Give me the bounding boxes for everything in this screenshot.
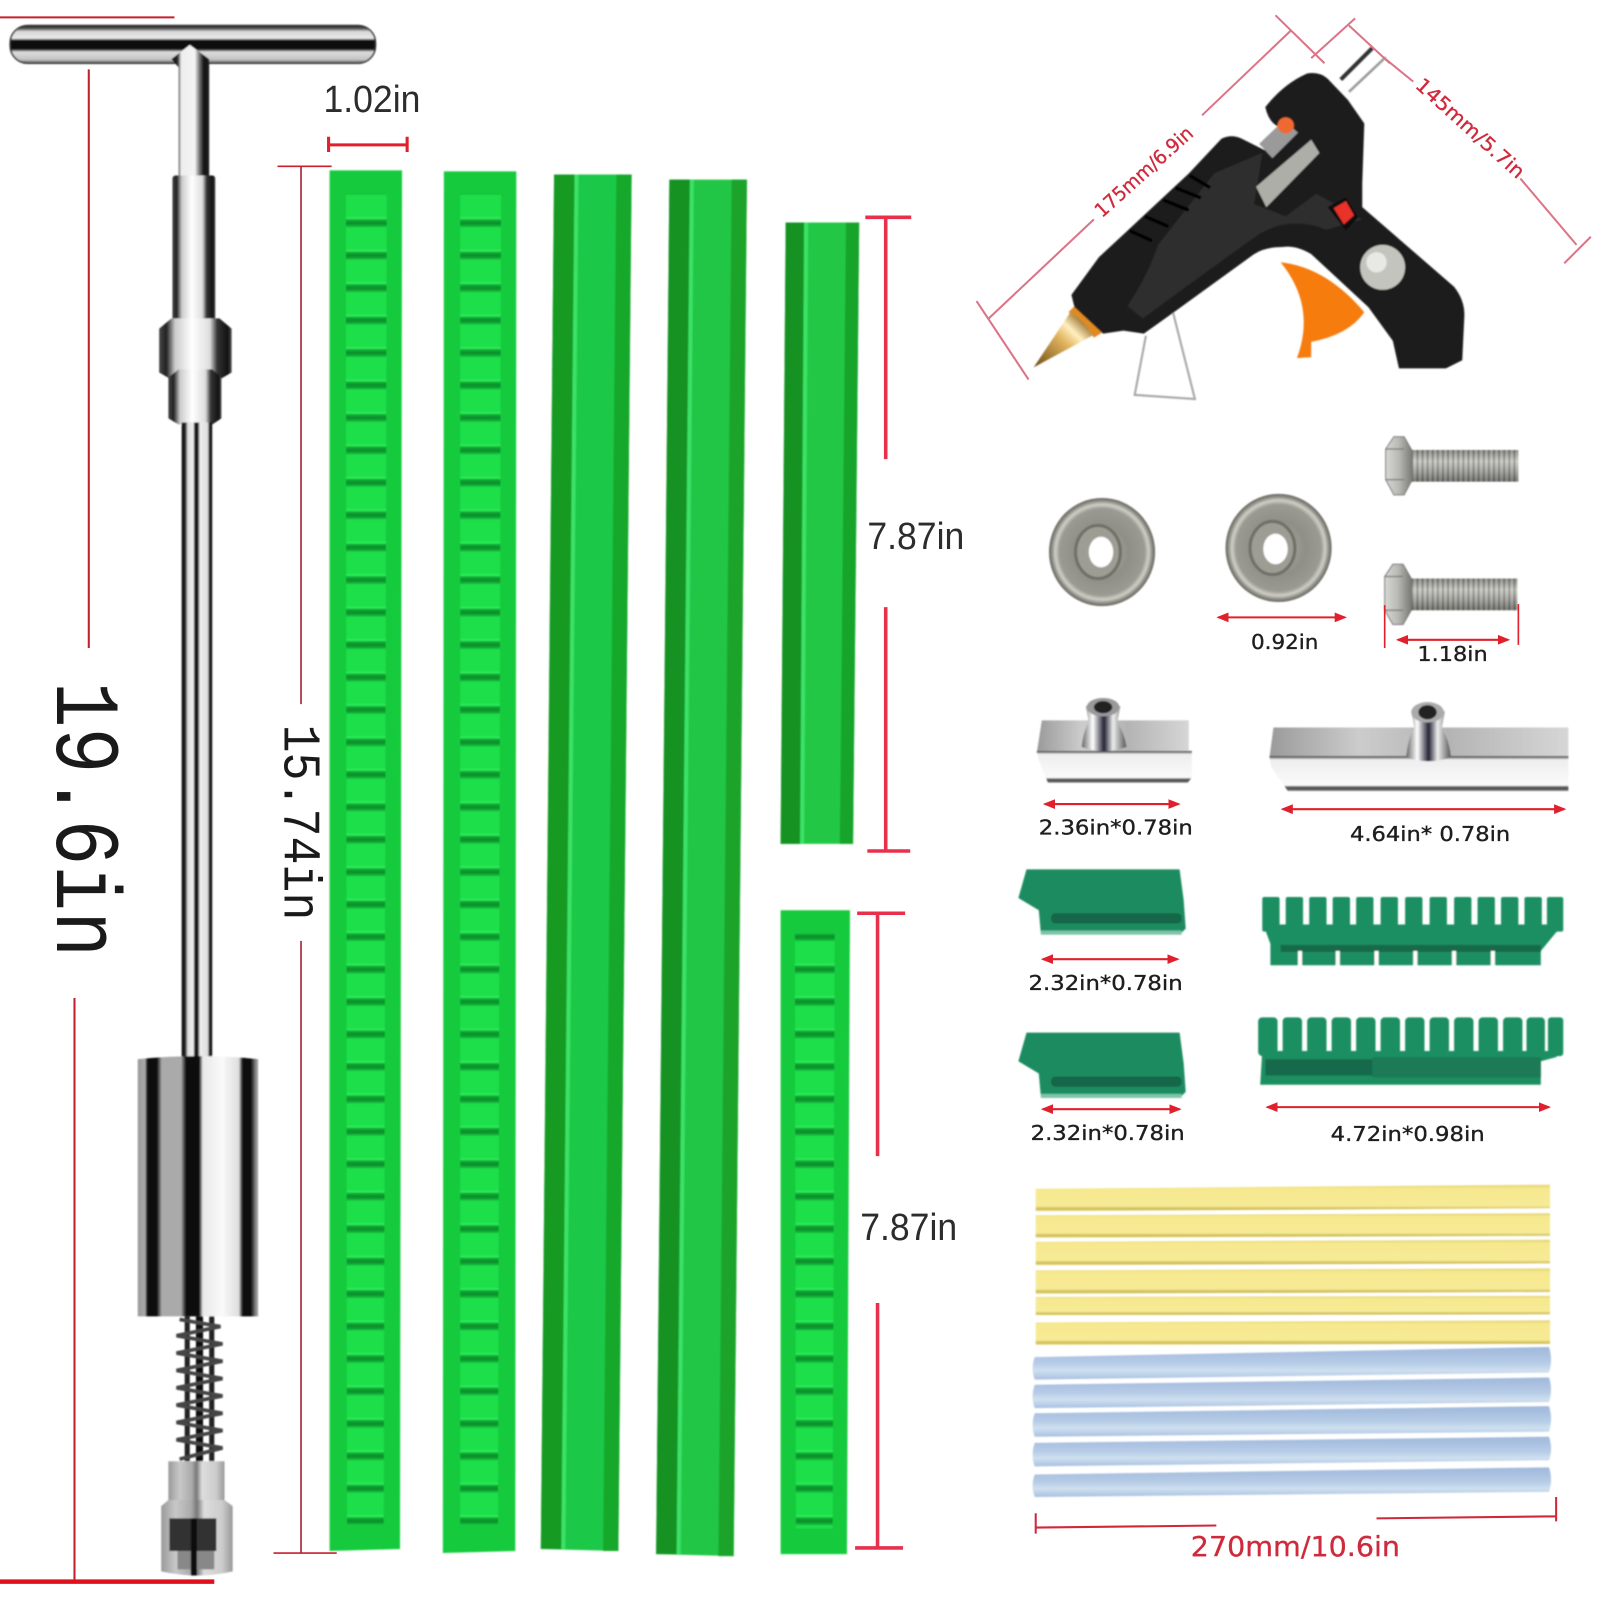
puller tip: [161, 1461, 233, 1576]
toothed strip 1: [330, 170, 402, 1551]
green tab lower: [1018, 1033, 1186, 1098]
feed rods: [1341, 48, 1372, 80]
dent puller tool: [10, 26, 376, 1576]
dimension: 145mm/5.7in: [1311, 18, 1591, 263]
stand wire: [1135, 302, 1195, 399]
dimension: 1.02in: 1.02in: [323, 78, 420, 120]
label: 2.32in*0.78in top: 2.32in*0.78in: [1029, 971, 1183, 995]
dimension: 270mm/10.6in: [1036, 1497, 1556, 1563]
dimension: 1.02in: [323, 78, 420, 152]
label: 4.64in*0.78in: 4.64in* 0.78in: [1350, 822, 1510, 846]
blue glue sticks: [1033, 1347, 1551, 1497]
green tab upper: [1018, 869, 1186, 935]
dimension: lower 7.87in: [855, 913, 957, 1548]
magnetic washer left: [1049, 498, 1155, 606]
lower nut: [168, 369, 221, 424]
grip ridges: [1130, 176, 1210, 241]
upper nut: [159, 318, 232, 380]
dimension: lower 7.87in: 7.87in: [860, 1206, 957, 1248]
label: 0.92in: 0.92in: [1251, 630, 1318, 654]
short plain strip: [781, 222, 859, 844]
collar: [172, 176, 215, 320]
dimension: upper 7.87in: 7.87in: [867, 515, 964, 557]
dimension: upper 7.87in: [865, 217, 964, 851]
slide rod: [182, 422, 212, 1057]
gun body: [1071, 73, 1464, 368]
label: 1.18in: 1.18in: [1417, 642, 1488, 666]
label: 1.18in: [1385, 604, 1518, 666]
long metal bar: [1269, 702, 1568, 791]
dimension: 175mm/6.9in: [977, 15, 1324, 380]
plain strip 3: [541, 174, 632, 1551]
T handle: [10, 26, 376, 63]
dimension: 15.74in: 15.74in: [269, 724, 329, 920]
slide weight: [138, 1056, 258, 1316]
yellow glue sticks: [1036, 1185, 1550, 1345]
silver window: [1256, 140, 1319, 207]
bolt bottom: [1385, 564, 1517, 624]
plain strip 4: [656, 180, 747, 1556]
label: 0.92in: [1218, 617, 1345, 654]
magnetic washer right: [1226, 494, 1332, 602]
trigger: [1281, 262, 1364, 358]
dimension: 145mm/5.7in: 145mm/5.7in: [1411, 73, 1529, 183]
glue gun: [1034, 48, 1464, 399]
body highlight panel: [1128, 153, 1362, 318]
dimension: 175mm/6.9in: 175mm/6.9in: [1090, 122, 1198, 222]
short metal bar: [1037, 698, 1192, 783]
bolt top: [1386, 437, 1518, 495]
label: 2.36in*0.78in: 2.36in*0.78in: [1039, 816, 1193, 840]
round badge: [1360, 245, 1405, 290]
toothed strip 2: [443, 171, 516, 1553]
glue cavity: [1259, 120, 1298, 158]
dimension: 15.74in: [269, 166, 337, 1553]
spring: [177, 1316, 222, 1461]
toothed green tab lower: [1258, 1017, 1563, 1085]
power switch: [1328, 197, 1358, 231]
label: 4.72in*0.98in: 4.72in*0.98in: [1331, 1122, 1485, 1146]
dimension: 270mm/10.6in: 270mm/10.6in: [1191, 1531, 1400, 1563]
short toothed strip: [781, 910, 850, 1554]
neck: [171, 45, 209, 176]
toothed green tab upper: [1262, 897, 1563, 967]
nozzle: [1034, 306, 1098, 367]
dimension: 19.6in: 19.6in: [29, 682, 133, 957]
label: 2.32in*0.78in bottom: 2.32in*0.78in: [1031, 1121, 1185, 1145]
